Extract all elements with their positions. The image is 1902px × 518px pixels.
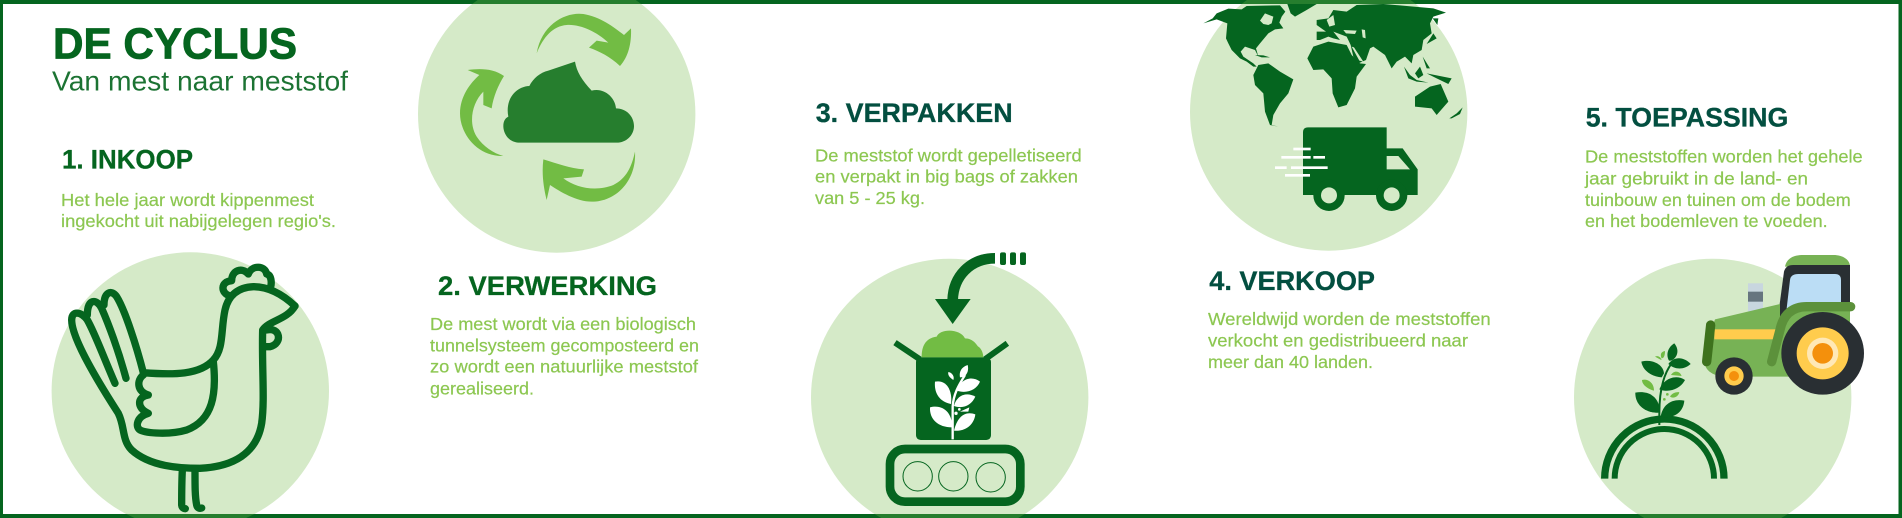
- body: toepassing: tuinbouw en tuinen om de bodem: [1585, 190, 1851, 210]
- arrow: into box: [935, 252, 1026, 324]
- heading: verwerking: 2. VERWERKING: [438, 271, 657, 301]
- icon: white plant: [930, 365, 980, 439]
- fertilizer heap: [922, 331, 983, 357]
- icon: world map: [1203, 4, 1463, 127]
- title: DE CYCLUS: [53, 20, 297, 69]
- body: toepassing: en het bodemleven te voeden.: [1585, 211, 1828, 231]
- body: verpakken: De meststof wordt gepelletiseerd: [815, 145, 1082, 165]
- arrow: left: [460, 69, 504, 156]
- icon: chicken: [72, 267, 295, 509]
- icon: plant on soil arches: [1605, 343, 1724, 479]
- title block: [52, 20, 348, 97]
- subtitle: Van mest naar meststof: [52, 66, 348, 97]
- panel: step 1 text: [61, 145, 336, 231]
- arrow: bottom: [543, 152, 635, 202]
- arrow: top: [537, 14, 631, 66]
- panel: step 4 text: [1208, 266, 1491, 372]
- panel: step 3 text: [815, 98, 1082, 208]
- heading: verkoop: 4. VERKOOP: [1209, 266, 1375, 296]
- speed lines: [1275, 148, 1328, 177]
- icon: compost heap: [503, 62, 634, 143]
- body: inkoop: Het hele jaar wordt kippenmest: [61, 190, 314, 210]
- body: verkoop: meer dan 40 landen.: [1208, 352, 1373, 372]
- icon: delivery truck: [1275, 127, 1418, 211]
- body: verpakken: en verpakt in big bags of zakken: [815, 166, 1078, 186]
- icon: packaging on conveyor: [890, 252, 1026, 502]
- icon: recycling arrows around compost: [460, 14, 635, 202]
- map gaps: seas: [1260, 13, 1366, 62]
- heading: toepassing: 5. TOEPASSING: [1586, 103, 1788, 133]
- panel: step 2 text: [430, 271, 699, 399]
- body: verkoop: Wereldwijd worden de meststoffen: [1208, 309, 1491, 329]
- body: verkoop: verkocht en gedistribueerd naar: [1208, 331, 1468, 351]
- box: [895, 343, 1007, 440]
- body: verwerking: tunnelsysteem gecomposteerd en: [430, 336, 699, 356]
- body: verwerking: zo wordt een natuurlijke meststof: [430, 357, 698, 377]
- heading: verpakken: 3. VERPAKKEN: [816, 98, 1013, 128]
- body: verwerking: De mest wordt via een biologisch: [430, 314, 696, 334]
- conveyor belt: [890, 449, 1020, 502]
- heading: inkoop: 1. INKOOP: [62, 145, 193, 175]
- icon: tractor: [1705, 255, 1864, 395]
- body: verwerking: gerealiseerd.: [430, 379, 534, 399]
- body: verpakken: van 5 - 25 kg.: [815, 188, 925, 208]
- body: toepassing: De meststoffen worden het gehele: [1585, 146, 1863, 166]
- body: inkoop: ingekocht uit nabijgelegen regio's.: [61, 211, 336, 231]
- body: toepassing: jaar gebruikt in de land- en: [1584, 168, 1808, 188]
- panel: step 5 text: [1584, 103, 1863, 231]
